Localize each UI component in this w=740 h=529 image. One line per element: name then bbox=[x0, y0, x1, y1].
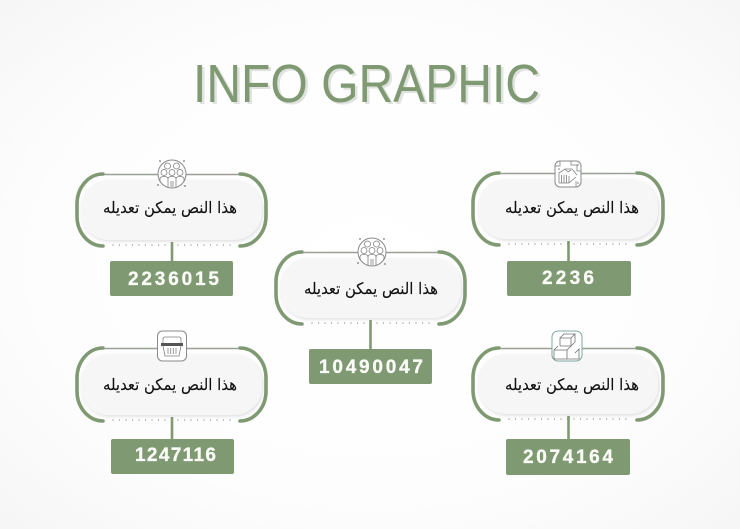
label text: هذا النص يمكن تعديله bbox=[103, 198, 237, 218]
connector bbox=[171, 242, 173, 261]
label text: هذا النص يمكن تعديله bbox=[505, 375, 639, 395]
icon: basket bbox=[158, 331, 186, 361]
icon: people bbox=[357, 238, 386, 266]
frame bbox=[77, 348, 266, 421]
value: 2074164 bbox=[523, 447, 613, 468]
label text: هذا النص يمكن تعديله bbox=[103, 375, 237, 395]
frame bbox=[276, 252, 465, 324]
value box bbox=[507, 261, 631, 296]
panel background bbox=[280, 258, 461, 318]
value: 2236 bbox=[542, 268, 594, 289]
icon: people bbox=[157, 160, 186, 188]
panel: bottom left bbox=[77, 331, 266, 474]
connector bbox=[369, 320, 372, 349]
value: 2236015 bbox=[128, 269, 219, 290]
frame bbox=[473, 348, 663, 420]
connector bbox=[171, 417, 173, 439]
connector bbox=[567, 416, 570, 439]
value box bbox=[506, 439, 630, 475]
value box bbox=[111, 439, 234, 474]
value: 1247116 bbox=[135, 445, 216, 466]
value box bbox=[309, 349, 432, 384]
connector bbox=[567, 241, 570, 261]
frame bbox=[77, 174, 266, 246]
value box bbox=[110, 261, 233, 296]
panel background bbox=[478, 354, 658, 414]
panel: bottom right bbox=[473, 331, 663, 475]
icon: handshake bbox=[555, 161, 581, 187]
icon: boxes bbox=[552, 331, 582, 361]
title: INFO GRAPHIC bbox=[196, 56, 542, 116]
frame bbox=[473, 173, 663, 245]
panel: center bbox=[276, 238, 465, 384]
panel background bbox=[478, 179, 658, 239]
panel background bbox=[81, 180, 262, 240]
label text: هذا النص يمكن تعديله bbox=[304, 279, 438, 299]
panel: top right bbox=[473, 161, 663, 296]
panel: top left bbox=[77, 160, 266, 296]
value: 10490047 bbox=[319, 357, 423, 378]
label text: هذا النص يمكن تعديله bbox=[505, 198, 639, 218]
panel background bbox=[81, 354, 262, 415]
title: INFO GRAPHIC bbox=[193, 54, 540, 114]
